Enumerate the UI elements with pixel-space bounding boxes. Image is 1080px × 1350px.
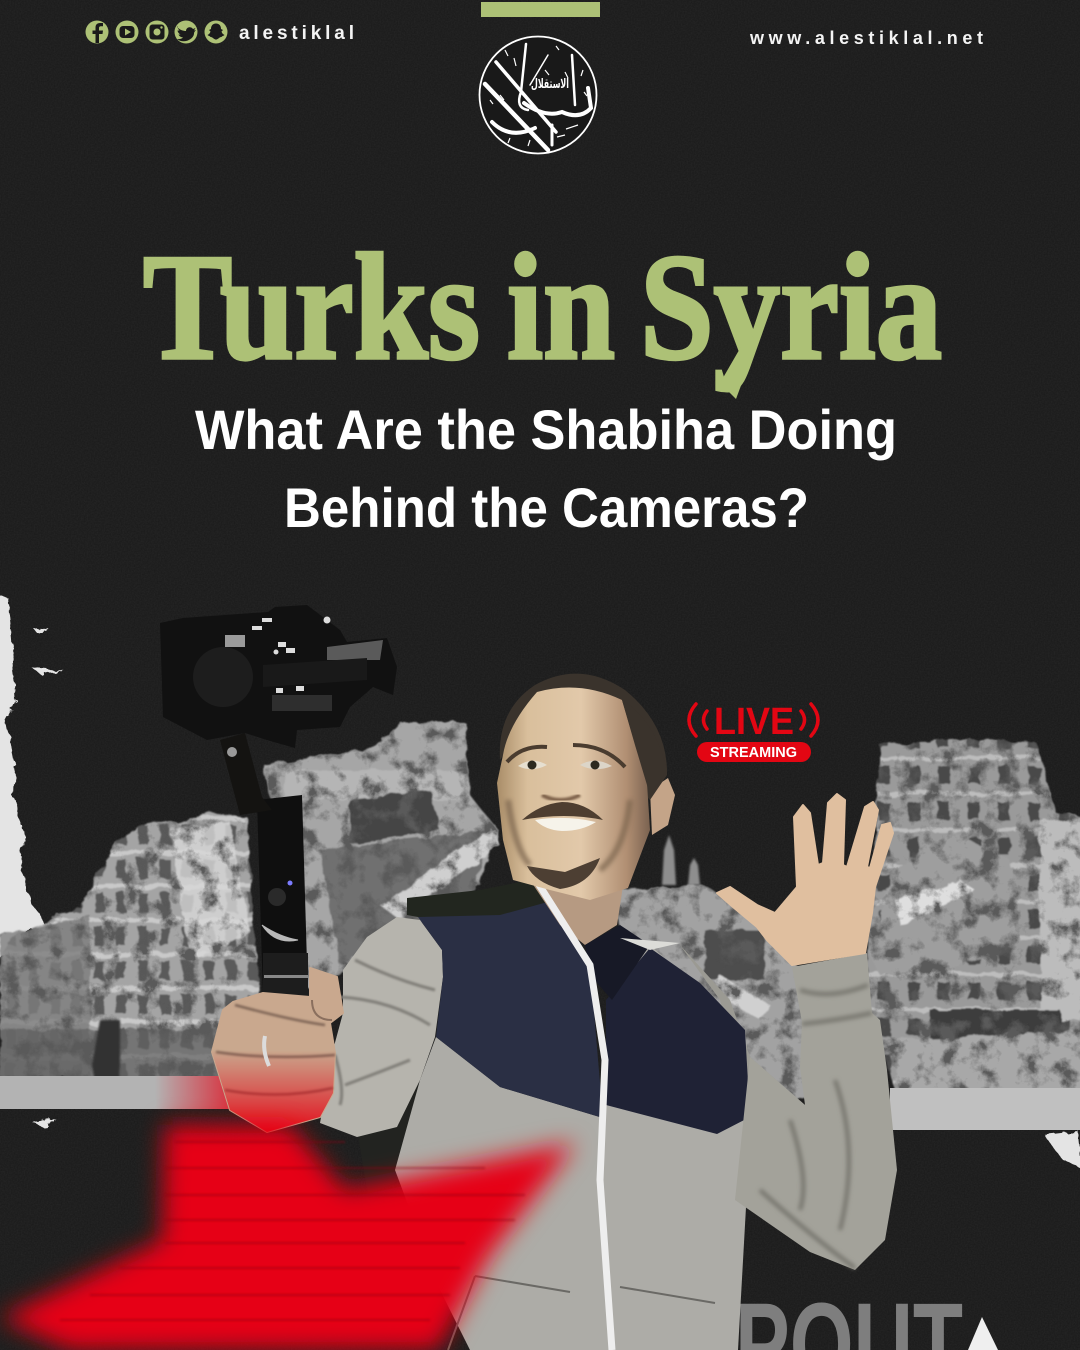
shoulder sleeve (681, 946, 805, 1105)
gripping hand (205, 968, 350, 1135)
subtitle: What Are the Shabiha Doing (195, 398, 897, 461)
torn paper edges (0, 590, 1080, 1169)
ear (650, 778, 675, 835)
right sleeve (735, 953, 897, 1270)
left sleeve folds (335, 960, 435, 1105)
subtitle: Behind the Cameras? (284, 476, 809, 539)
pockets (448, 1276, 715, 1350)
hair (500, 674, 667, 800)
logo: calligraphy roundel: الاستقلال (531, 77, 569, 92)
cyclist (92, 1020, 120, 1100)
gimbal handle (257, 795, 308, 997)
ring (264, 1036, 269, 1066)
ruins: left block (0, 812, 264, 1078)
inner collar (585, 925, 650, 1000)
social icons (86, 20, 228, 44)
red motion streak (0, 1125, 575, 1350)
logo: calligraphy roundel (480, 36, 596, 154)
hood (407, 882, 542, 917)
neck (534, 886, 622, 945)
red fade on the ground (155, 1076, 245, 1109)
ruins: centre block (264, 722, 500, 990)
title: Syria (640, 223, 942, 391)
presenter (160, 605, 897, 1350)
navy panel right (606, 948, 750, 1134)
nose shadow (542, 795, 580, 800)
navy panel left (418, 900, 603, 1118)
destroyed city backdrop (0, 722, 1080, 1130)
ruins: right block (865, 740, 1080, 1095)
left sleeve (320, 917, 443, 1137)
zipper (536, 880, 612, 1350)
raised hand (717, 794, 893, 965)
title: in (507, 223, 615, 391)
live streaming badge: LIVE (714, 701, 794, 743)
hoodie body (395, 945, 752, 1350)
ruins: centre-right rubble (615, 885, 810, 1100)
live streaming badge (689, 701, 818, 762)
ground strip right (890, 1088, 1080, 1130)
title (143, 223, 942, 399)
goatee and stubble (508, 800, 630, 889)
title: Turks (143, 223, 480, 391)
camera (160, 605, 397, 757)
hair side shade (622, 700, 648, 786)
header bar (481, 2, 600, 17)
mustache and smile (522, 802, 603, 831)
collar trim (620, 938, 680, 950)
underarm shadow (371, 1094, 415, 1145)
live streaming badge: STREAMING (710, 745, 797, 761)
brand name: alestiklal (239, 23, 354, 44)
face (497, 688, 650, 900)
subtitle (195, 398, 897, 539)
right sleeve folds (760, 985, 872, 1268)
gimbal arm (220, 733, 264, 815)
minaret towers (662, 835, 700, 885)
brows and eyes (507, 745, 625, 770)
website: www.alestiklal.net (749, 28, 983, 48)
ground strip left (0, 1076, 240, 1109)
